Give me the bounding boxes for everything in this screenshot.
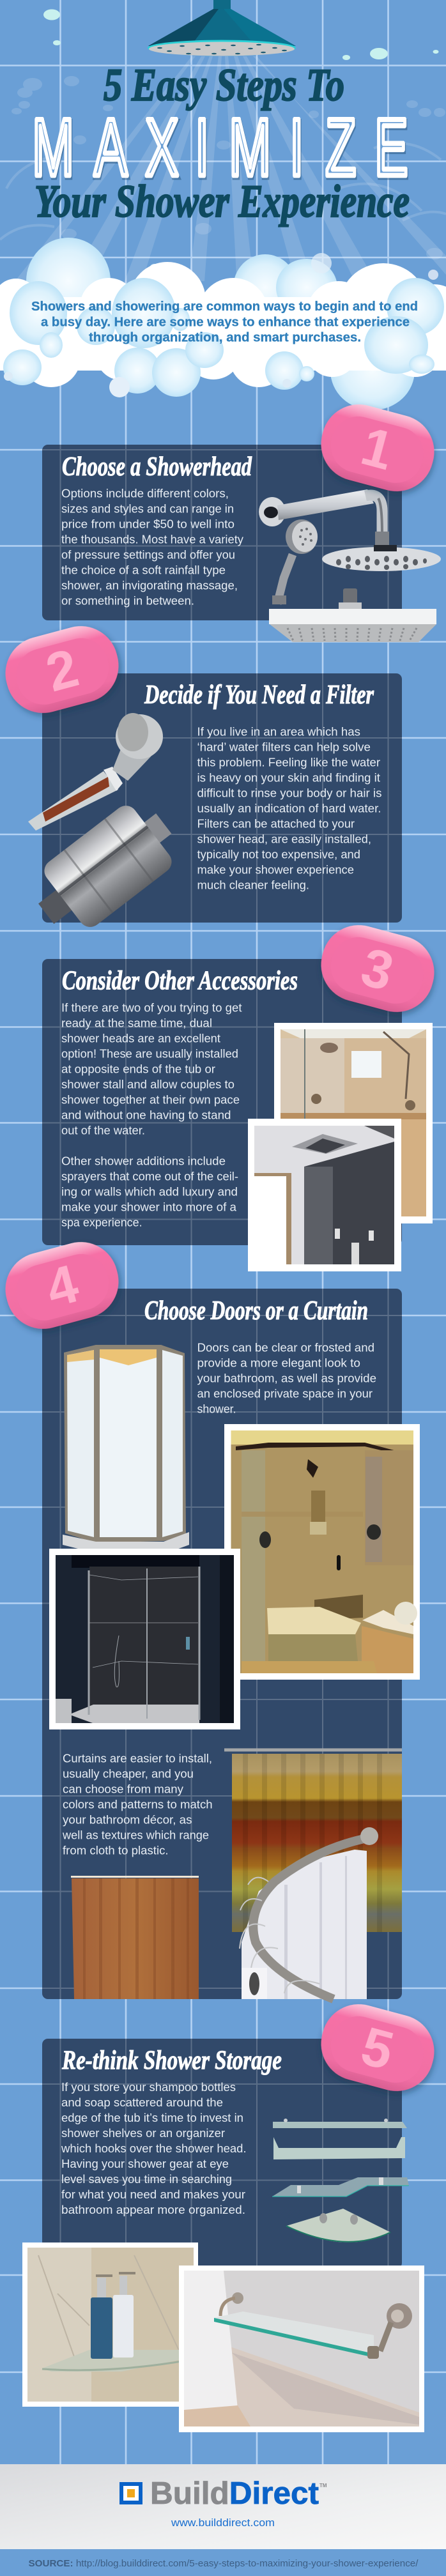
body text: curtains [62, 1752, 213, 1857]
body text: or something in between. [61, 594, 194, 608]
body text: this problem. Feeling like the water [197, 755, 380, 769]
body text: sizes and styles and can range in [61, 502, 234, 516]
body text: and without one having to stand [61, 1108, 231, 1122]
body text: the choice of a soft rainfall type [61, 564, 226, 577]
body text: curtains: from cloth to plastic. [63, 1844, 169, 1857]
body text: for what you need and makes your [61, 2188, 245, 2201]
source line: SOURCE: http://blog.builddirect.com/5-easy-steps-to-maximizing-your-shower-experience/ [28, 2558, 419, 2569]
body text: doors: your bathroom, as well as provide [197, 1372, 376, 1385]
website: www.builddirect.com [171, 2517, 275, 2529]
body text: ‘hard’ water filters can help solve [197, 740, 371, 753]
heading: Decide if You Need a Filter [144, 680, 374, 710]
body text: which hooks over the shower head. [61, 2142, 247, 2155]
photo: dual shower heads [274, 1023, 433, 1223]
heading: Re-think Shower Storage [61, 2046, 282, 2076]
body text: sprayers that come out of the ceil- [61, 1170, 238, 1183]
icon: handheld shower [272, 519, 318, 604]
soap badge 1 [313, 396, 442, 500]
intro text [31, 300, 418, 345]
body text: usually an indication of hard water. [197, 801, 381, 815]
logo: BuildDirect: BuildDirect [150, 2476, 319, 2511]
body text: difficult to rinse your body or hair is [197, 786, 382, 799]
photo: brown curtain [71, 1876, 199, 1999]
body text: Filters can be attached to your [197, 816, 355, 830]
body text: doors: Doors can be clear or frosted and [197, 1341, 374, 1354]
floating bubbles [43, 9, 438, 60]
body text: doors: provide a more elegant look to [197, 1356, 360, 1370]
body text: Other shower additions include [61, 1154, 226, 1168]
photo: glass bar shelf [179, 2266, 424, 2432]
body text: doors [197, 1341, 376, 1416]
body text: shower head, are easily installed, [197, 832, 371, 845]
body text: If you live in an area which has [197, 724, 360, 738]
body text: curtains: Curtains are easier to install, [63, 1752, 212, 1765]
body text: option! These are usually installed [61, 1047, 238, 1061]
body text: ready at the same time, dual [61, 1016, 212, 1030]
panel: consider other accessories [61, 917, 442, 1271]
heading: Choose a Showerhead [62, 452, 252, 482]
intro text: through organization, and smart purchases. [89, 331, 361, 345]
body text: curtains: your bathroom décor, as [63, 1813, 192, 1827]
body text: shower together at their own pace [61, 1093, 240, 1107]
logo: BuildDirect: TM [319, 2483, 327, 2488]
icon: filter shower wand [28, 713, 163, 831]
icon: shower head [148, 0, 296, 56]
body text: is heavy on your skin and finding it [197, 770, 380, 784]
panel: choose a showerhead [61, 396, 442, 642]
body text: shower, an invigorating massage, [61, 579, 238, 592]
photo: ceiling rain shower [248, 1119, 401, 1271]
panel: re-think shower storage [22, 1996, 442, 2432]
icon: square rain shower head [269, 588, 436, 642]
icon: wall mounted shower arm and round head [259, 489, 441, 571]
body text: out of the water. [61, 1124, 145, 1137]
body text: bathroom appear more organized. [61, 2203, 245, 2216]
body text: of pressure settings and offer you [61, 548, 235, 562]
soap badge 4: 4 [40, 1253, 84, 1319]
body text: typically not too expensive, and [197, 847, 360, 861]
soap badge 4 [0, 1234, 127, 1337]
photo: striped curtain [224, 1748, 402, 1932]
soap badge 3: 3 [355, 937, 399, 1002]
body text: and soap scattered around the [61, 2096, 223, 2109]
spray and background bubbles [0, 56, 446, 319]
body text [61, 2080, 247, 2216]
body text [197, 724, 382, 891]
soap badge 5 [313, 1996, 442, 2099]
body text: shower stall and allow couples to [61, 1078, 235, 1091]
body text: doors: an enclosed private space in your [197, 1387, 373, 1400]
body text [61, 1001, 242, 1229]
body text: at opposite ends of the tub or [61, 1062, 215, 1076]
body text: curtains: usually cheaper, and you [63, 1767, 194, 1781]
intro text: Showers and showering are common ways to begin and to end [31, 300, 418, 314]
body text: shower heads are an excellent [61, 1032, 220, 1045]
panel backgrounds [38, 441, 409, 2274]
body text: doors: shower. [197, 1402, 236, 1416]
intro text: a busy day. Here are some ways to enhance that experience [41, 316, 410, 330]
body text: curtains: colors and patterns to match [63, 1798, 213, 1811]
body text: curtains: well as textures which range [62, 1828, 209, 1842]
body text: Options include different colors, [61, 487, 229, 500]
soap badge 3 [313, 917, 442, 1020]
body text [61, 487, 244, 608]
foam [0, 238, 446, 410]
soap badge 2: 2 [40, 638, 84, 703]
body text: curtains: can choose from many [63, 1782, 184, 1796]
footer band [0, 2464, 446, 2549]
title: MAXIMIZE [32, 102, 408, 193]
title: 5 Easy Steps To [104, 59, 344, 111]
body text: level saves you time in searching [61, 2172, 232, 2186]
photo: curved rod with white curtain [240, 1827, 378, 1999]
photo: corner shelf with bottles [22, 2242, 198, 2407]
photo: frosted neo-angle enclosure [63, 1345, 189, 1553]
title: MAXIMIZE [33, 104, 409, 195]
soap badge 5: 5 [355, 2016, 399, 2081]
icon: glass shelves [272, 2119, 409, 2242]
heading: Consider Other Accessories [62, 967, 298, 996]
body text: edge of the tub it’s time to invest in [61, 2111, 243, 2124]
body text: If there are two of you trying to get [61, 1001, 242, 1015]
body text: make your shower into more of a [61, 1200, 237, 1214]
soap badge 1: 1 [355, 416, 399, 481]
title [32, 59, 410, 227]
panel: decide if you need a filter [0, 618, 381, 945]
body text: the thousands. Most have a variety [61, 533, 244, 546]
body text: ing or walls which add luxury and [61, 1185, 238, 1199]
body text: make your shower experience [197, 862, 354, 876]
body text: Having your shower gear at eye [61, 2157, 229, 2170]
body text: spa experience. [61, 1216, 142, 1229]
photo: dark tile glass door [49, 1549, 240, 1729]
photo: stone corner shower [224, 1424, 420, 1680]
soap badge 2 [0, 618, 127, 721]
body text: much cleaner feeling. [197, 878, 309, 891]
body text: shower shelves or an organizer [61, 2126, 225, 2140]
icon: chrome inline filter [22, 792, 188, 945]
body text: If you store your shampoo bottles [61, 2080, 236, 2094]
heading: Choose Doors or a Curtain [144, 1296, 368, 1326]
panel: choose doors or a curtain [0, 1234, 420, 1999]
body text: price from under $50 to well into [61, 518, 235, 531]
